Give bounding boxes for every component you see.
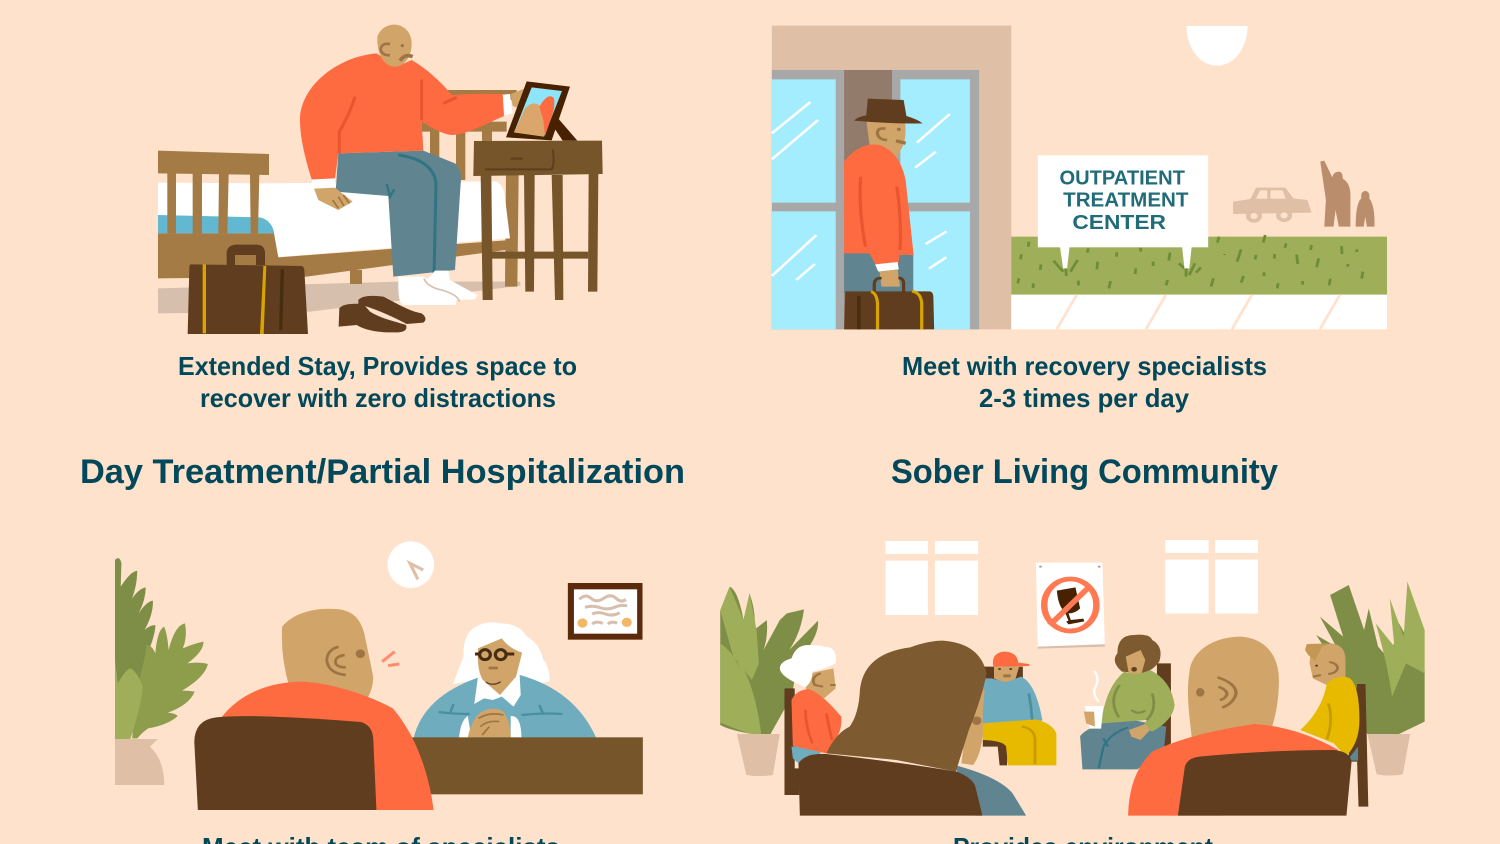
bed frame and footboard xyxy=(158,151,510,284)
counselor: glasses xyxy=(475,650,514,660)
suitcase xyxy=(874,278,904,292)
right pot xyxy=(1367,734,1410,775)
foreground bald man back view xyxy=(1128,637,1352,816)
counselor: sweater xyxy=(414,675,596,738)
car xyxy=(1233,188,1311,223)
shoes xyxy=(358,296,425,324)
right plant xyxy=(1316,582,1425,734)
seated woman: chair xyxy=(1143,663,1171,760)
panel: extended stay illustration xyxy=(158,25,603,334)
sign board xyxy=(1038,155,1208,247)
foreground woman back view xyxy=(798,641,1026,816)
man: pants xyxy=(336,151,461,277)
man in yellow xyxy=(1300,643,1359,761)
sign text: CENTER: CENTER xyxy=(1072,211,1166,234)
counselor: face xyxy=(478,638,522,695)
man: cuffs and hands xyxy=(312,94,513,189)
back headboard xyxy=(422,90,519,287)
man: head xyxy=(866,120,906,157)
counselor: clasped hands xyxy=(468,709,511,737)
patient: chair xyxy=(194,716,376,810)
heading: sober living: Sober Living Community xyxy=(891,453,1278,491)
sign text: OUTPATIENT: OUTPATIENT xyxy=(1060,166,1185,189)
man: sweater xyxy=(300,53,504,179)
far left woman xyxy=(780,645,841,763)
panel: day treatment illustration xyxy=(115,541,643,810)
door frame xyxy=(772,70,979,329)
prohibition symbol xyxy=(1044,579,1096,631)
caption: recovery specialists: 2-3 times per day xyxy=(979,383,1190,413)
window right xyxy=(1165,540,1258,614)
sidewalk xyxy=(1011,295,1387,329)
man: pants xyxy=(844,253,913,293)
suitcase xyxy=(227,245,265,265)
windows xyxy=(772,79,970,329)
building wall xyxy=(772,26,1011,329)
nightstand xyxy=(473,141,603,300)
desk xyxy=(411,737,643,794)
counselor: collar and cuffs xyxy=(474,675,521,707)
grass tufts xyxy=(1018,235,1363,288)
caption: extended stay: Extended Stay, Provides space to xyxy=(178,351,577,381)
lawn xyxy=(1011,237,1387,295)
steam xyxy=(1094,671,1099,702)
far left woman: chair xyxy=(784,688,799,795)
left plant xyxy=(720,587,818,734)
man: sweater xyxy=(844,145,914,264)
man in yellow: chair xyxy=(1348,684,1368,807)
mattress xyxy=(158,181,510,257)
speech marks xyxy=(382,652,399,666)
floor shadow xyxy=(158,282,521,313)
window left xyxy=(886,541,978,615)
no alcohol poster xyxy=(1038,644,1105,649)
door opening xyxy=(844,70,892,329)
wall clock xyxy=(387,541,434,588)
caption: recovery specialists xyxy=(902,351,1267,413)
wine glass xyxy=(1057,587,1084,624)
caption: extended stay xyxy=(178,351,577,413)
pillow xyxy=(158,215,274,233)
caption: recovery specialists: Meet with recovery specialists xyxy=(902,351,1267,381)
seated woman xyxy=(1080,635,1175,769)
sign text: TREATMENT: TREATMENT xyxy=(1063,188,1189,211)
left pot xyxy=(737,734,780,776)
caption: extended stay: recover with zero distractions xyxy=(200,383,556,413)
panel: sober living illustration xyxy=(720,540,1425,816)
sign post xyxy=(1060,247,1192,268)
man: cuff and hand xyxy=(875,262,899,272)
heading: day treatment: Day Treatment/Partial Hospitalization xyxy=(80,453,685,491)
plant pot xyxy=(115,739,164,785)
plant xyxy=(115,558,208,739)
patient: sweater xyxy=(221,682,434,810)
man: head xyxy=(377,25,412,67)
socks xyxy=(398,271,477,305)
man with cap: chair xyxy=(983,667,1023,765)
certificate xyxy=(568,583,642,640)
man with cap xyxy=(983,652,1056,765)
sun xyxy=(1186,26,1248,66)
picture frame xyxy=(553,117,577,141)
distant people xyxy=(1320,161,1375,227)
panel: outpatient treatment illustration xyxy=(772,26,1387,329)
patient: head xyxy=(282,609,373,700)
man: hat xyxy=(854,99,923,123)
counselor: hair xyxy=(453,622,550,687)
